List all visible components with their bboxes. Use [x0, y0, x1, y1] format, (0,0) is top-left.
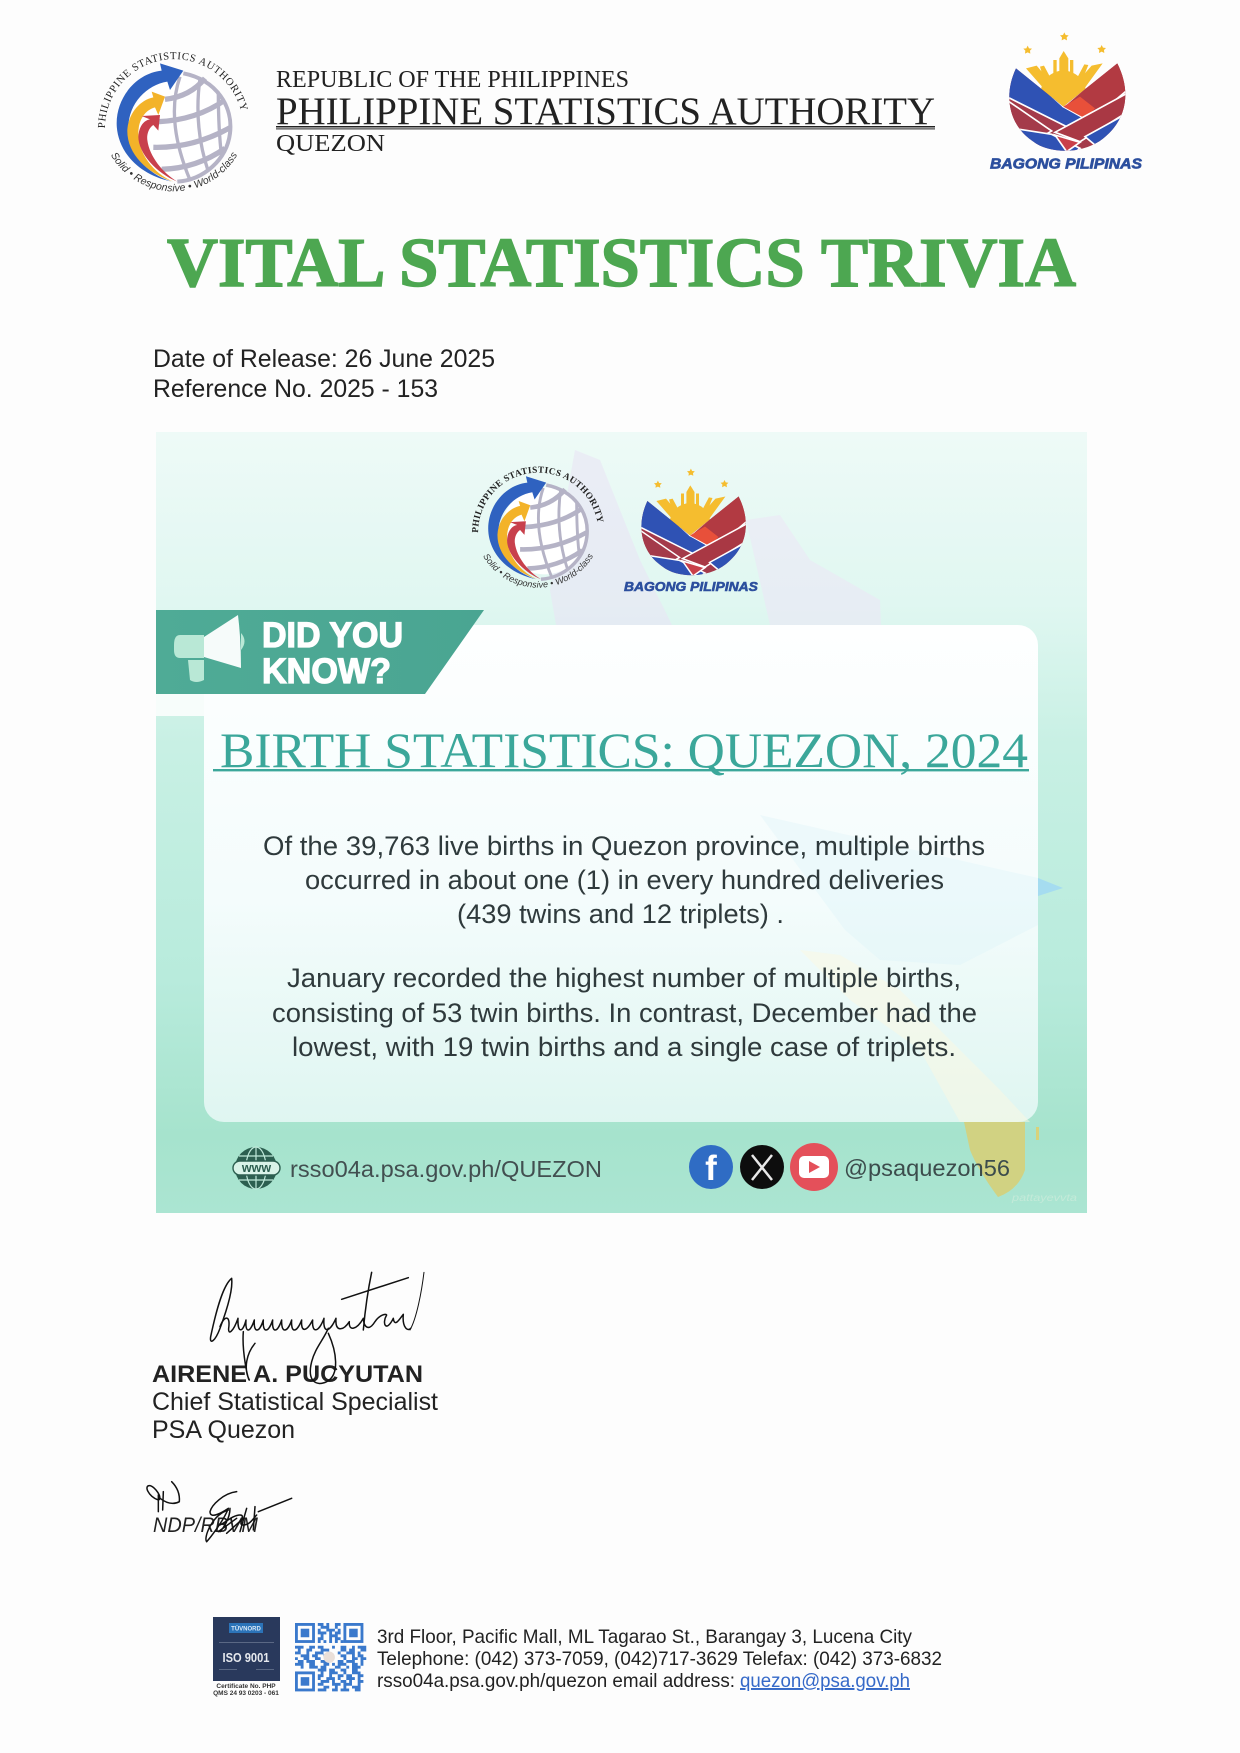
header: agency text block: REPUBLIC OF THE PHILIPPINES — [276, 67, 629, 93]
title: VITAL STATISTICS TRIVIA — [167, 225, 1076, 302]
ISO 9001 certification badge — [213, 1617, 280, 1697]
map credit: pattayevvta — [1011, 1193, 1078, 1204]
preparer initials: NDP/RBVM — [153, 1514, 258, 1537]
icon: YouTube — [790, 1143, 838, 1191]
icon: www globe — [233, 1147, 280, 1189]
release date and reference number: Reference No. 2025 - 153 — [153, 375, 438, 403]
small Bagong Pilipinas logo — [624, 469, 758, 594]
did you know banner — [156, 610, 484, 694]
body paragraph one: occurred in about one (1) in every hundred deliveries — [305, 865, 944, 895]
office address block — [377, 1626, 942, 1692]
signatory name and title — [152, 1361, 438, 1444]
small PSA logo — [472, 466, 604, 588]
header: agency text block: QUEZON — [276, 131, 385, 157]
website address: rsso04a.psa.gov.ph/QUEZON — [290, 1156, 602, 1182]
office address block: Telephone: (042) 373-7059, (042)717-3629 Telefax: (042) 373-6832 — [377, 1648, 942, 1670]
signatory name and title: AIRENE A. PUCYUTAN — [152, 1361, 423, 1388]
body paragraph two: consisting of 53 twin births. In contrast, December had the — [272, 998, 977, 1028]
QR code — [295, 1624, 366, 1690]
header: PSA logo — [98, 52, 248, 192]
body paragraph two — [272, 963, 977, 1062]
body paragraph one: (439 twins and 12 triplets) . — [457, 899, 784, 929]
body paragraph one — [263, 831, 985, 929]
initials signatures — [147, 1482, 292, 1542]
small PSA logo: PHILIPPINE STATISTICS AUTHORITY — [472, 466, 604, 533]
letter page — [98, 32, 1142, 1696]
header: PSA logo: PHILIPPINE STATISTICS AUTHORITY — [98, 52, 248, 128]
panel heading: BIRTH STATISTICS: QUEZON, 2024 — [220, 722, 1028, 778]
icon: X — [740, 1145, 784, 1189]
header: agency text block — [276, 67, 935, 157]
panel: did you know infographic — [156, 432, 1087, 1213]
signatory name and title: Chief Statistical Specialist — [152, 1388, 438, 1416]
office address block: quezon@psa.gov.ph — [740, 1670, 910, 1692]
icon: megaphone — [174, 615, 244, 682]
header: PSA logo: Solid • Responsive • World-class — [112, 152, 237, 192]
small PSA logo: Solid • Responsive • World-class — [484, 554, 593, 588]
ISO 9001 certification badge: Certificate No. PHP — [216, 1683, 276, 1690]
office address block: 3rd Floor, Pacific Mall, ML Tagarao St., Barangay 3, Lucena City — [377, 1626, 912, 1648]
release date and reference number: Date of Release: 26 June 2025 — [153, 345, 495, 373]
ISO 9001 certification badge: QMS 24 93 0203 - 061 — [213, 1690, 279, 1697]
icon: www globe: www — [241, 1161, 271, 1175]
header: Bagong Pilipinas logo — [990, 32, 1142, 172]
white text card — [204, 625, 1038, 1122]
office address block: rsso04a.psa.gov.ph/quezon email address: — [377, 1670, 735, 1692]
release date and reference number — [153, 345, 495, 403]
icon: facebook: f — [705, 1149, 717, 1188]
ISO 9001 certification badge: TÜVNORD — [231, 1626, 261, 1632]
body paragraph two: lowest, with 19 twin births and a single case of triplets. — [292, 1032, 956, 1062]
small Bagong Pilipinas logo: BAGONG PILIPINAS — [624, 579, 758, 594]
header: Bagong Pilipinas logo: BAGONG PILIPINAS — [990, 156, 1142, 172]
body paragraph one: Of the 39,763 live births in Quezon province, multiple births — [263, 831, 985, 861]
signature — [210, 1272, 424, 1383]
ISO 9001 certification badge: ISO 9001 — [222, 1651, 270, 1665]
body paragraph two: January recorded the highest number of multiple births, — [287, 963, 961, 993]
social handle: @psaquezon56 — [844, 1155, 1010, 1181]
icon: facebook — [689, 1145, 733, 1189]
signatory name and title: PSA Quezon — [152, 1416, 295, 1444]
did you know banner: DID YOU — [262, 616, 403, 655]
header: agency text block: PHILIPPINE STATISTICS AUTHORITY — [276, 90, 935, 133]
did you know banner: KNOW? — [262, 652, 391, 691]
